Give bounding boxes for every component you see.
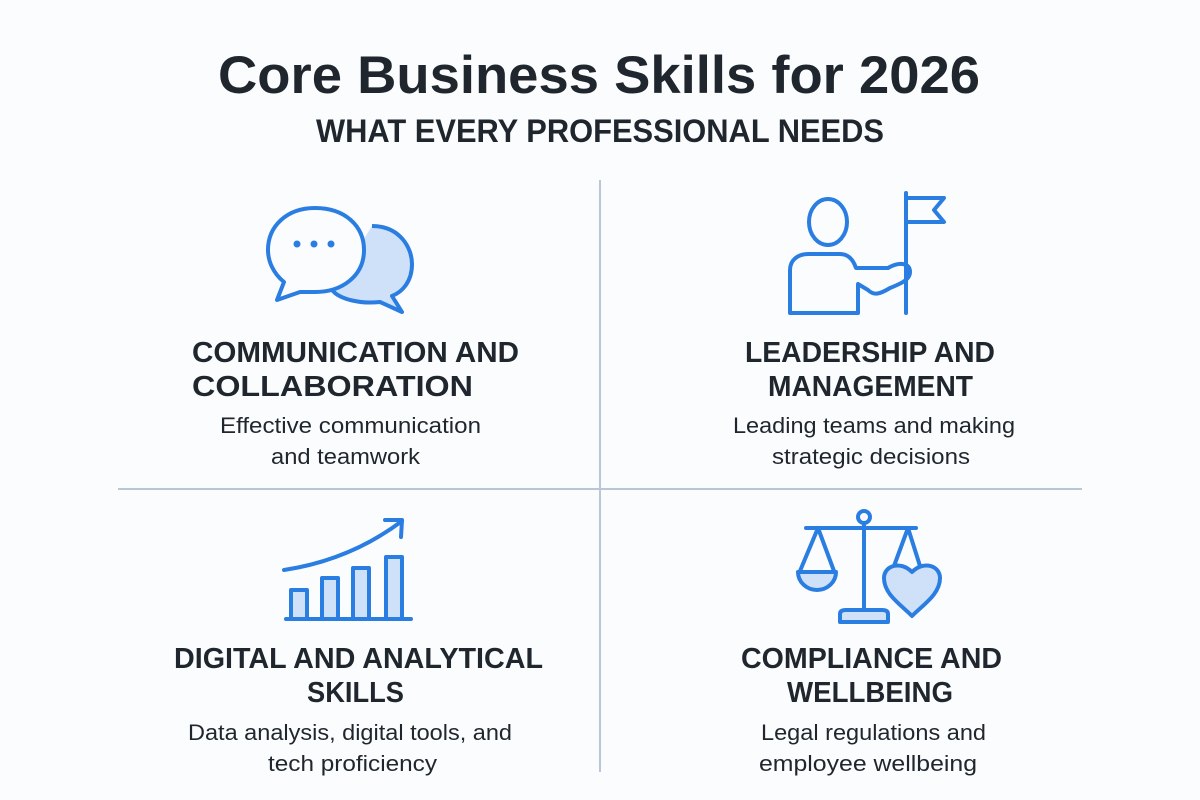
- heading: COMMUNICATION AND: [192, 337, 519, 369]
- description: Leading teams and making: [733, 413, 1015, 438]
- description: Effective communication: [220, 413, 481, 438]
- description: Legal regulations and: [761, 720, 986, 745]
- heading: COMPLIANCE AND: [741, 643, 1002, 675]
- description: Data analysis, digital tools, and: [188, 720, 512, 745]
- panel: leadership and management: [733, 193, 1015, 469]
- heading: LEADERSHIP AND: [745, 337, 995, 369]
- description: [220, 413, 481, 469]
- description: [733, 413, 1015, 469]
- heading: [174, 643, 543, 709]
- heading: DIGITAL AND ANALYTICAL: [174, 643, 543, 675]
- description: and teamwork: [271, 444, 421, 469]
- icon: person with flag: [790, 193, 944, 313]
- icon: chat bubbles: [268, 208, 412, 312]
- description: employee wellbeing: [759, 751, 977, 776]
- heading: MANAGEMENT: [768, 371, 973, 403]
- icon: bar chart with arrow: [284, 520, 411, 619]
- heading: WELLBEING: [787, 677, 953, 709]
- panel: communication and collaboration: [192, 208, 519, 469]
- heading: SKILLS: [307, 677, 404, 709]
- description: [759, 720, 986, 776]
- icon: scale with heart: [798, 511, 940, 622]
- heading: COLLABORATION: [192, 371, 473, 403]
- title: Core Business Skills for 2026: [218, 46, 980, 105]
- heading: [745, 337, 995, 403]
- subtitle: WHAT EVERY PROFESSIONAL NEEDS: [316, 113, 884, 149]
- description: strategic decisions: [772, 444, 970, 469]
- heading: [192, 337, 519, 403]
- heading: [741, 643, 1002, 709]
- description: tech proficiency: [268, 751, 437, 776]
- panel: compliance and wellbeing: [741, 511, 1002, 776]
- description: [188, 720, 512, 776]
- panel: digital and analytical skills: [174, 520, 543, 776]
